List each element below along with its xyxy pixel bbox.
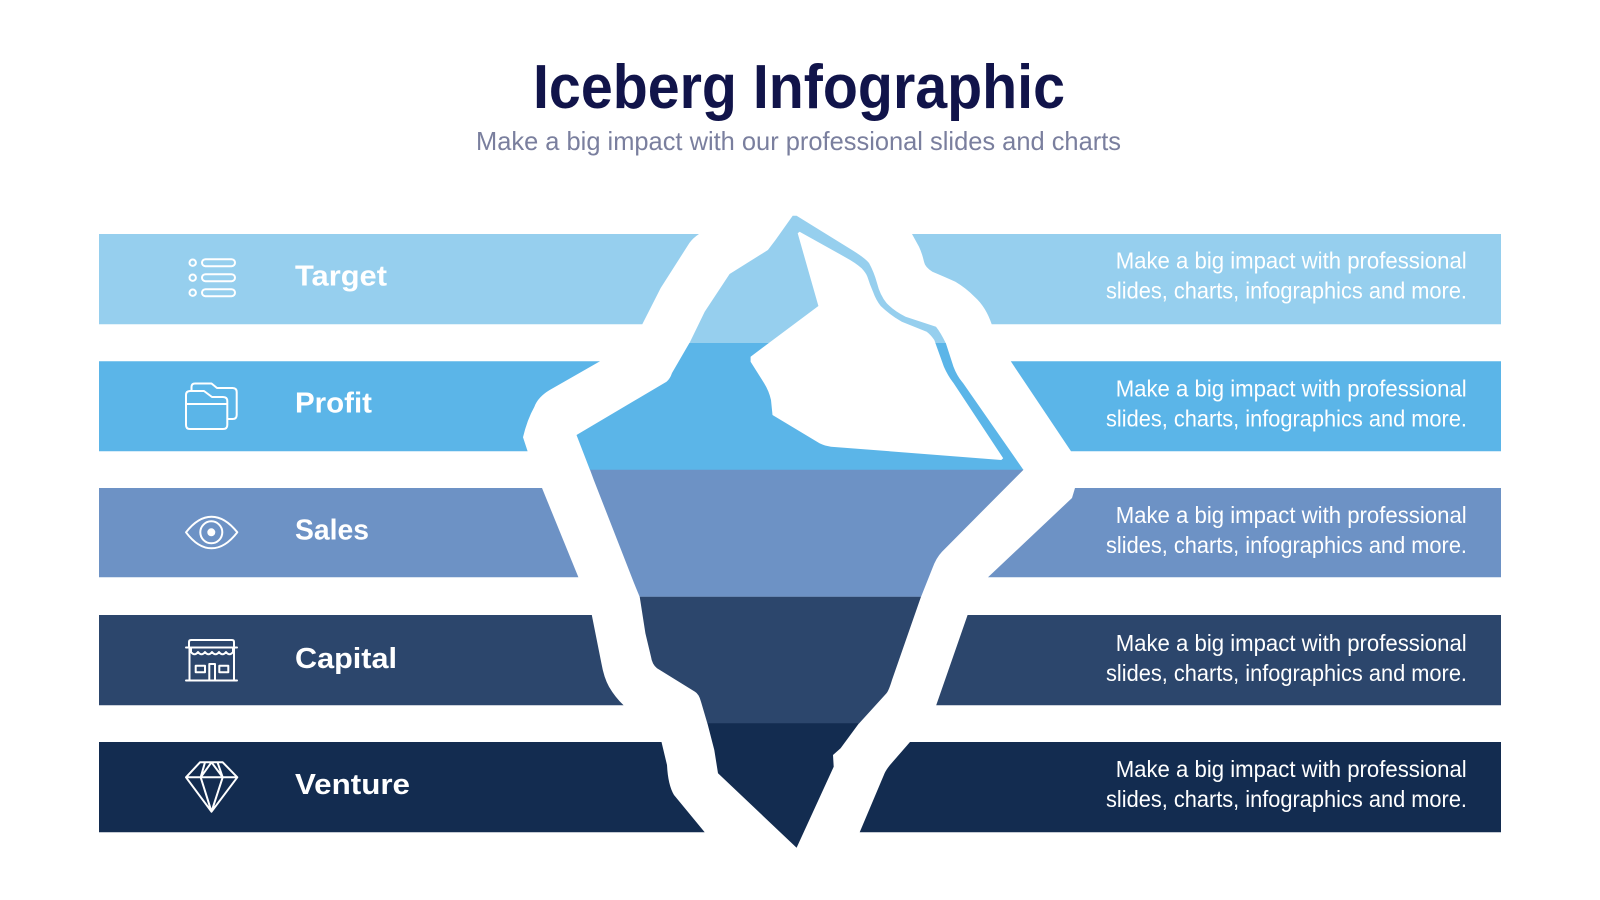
venture band left <box>99 742 705 832</box>
icon: list <box>190 259 235 296</box>
iceberg <box>576 216 1024 848</box>
subtitle: Make a big impact with our professional slides and charts <box>476 126 1121 156</box>
label: target: Target <box>295 260 387 292</box>
label: venture: Venture <box>295 769 410 801</box>
description: target: slides, charts, infographics and more. <box>1106 278 1467 304</box>
profit band right <box>1011 361 1501 451</box>
label: capital: Capital <box>295 643 397 675</box>
panel: target <box>99 234 1501 324</box>
capital band left <box>99 615 624 705</box>
description: capital: Make a big impact with professional <box>1116 630 1467 656</box>
panel: sales <box>99 488 1501 577</box>
label: sales: Sales <box>295 514 369 546</box>
icon: folder <box>186 384 237 429</box>
iceberg layer: base <box>707 723 859 848</box>
panel: capital <box>99 615 1501 705</box>
profit band left <box>99 361 600 451</box>
title: Iceberg Infographic <box>533 53 1065 122</box>
iceberg layer: upper water <box>590 470 1024 597</box>
icon: store <box>186 640 237 680</box>
panel: venture <box>99 742 1501 832</box>
icon: eye <box>186 517 237 548</box>
iceberg layer: peak <box>689 216 946 343</box>
description: venture: slides, charts, infographics and more. <box>1106 786 1467 812</box>
description: venture: Make a big impact with professional <box>1116 756 1467 782</box>
iceberg snow face <box>751 232 1003 460</box>
iceberg layer: deep water <box>640 597 921 724</box>
description: sales: slides, charts, infographics and more. <box>1106 532 1467 558</box>
iceberg layer: waterline <box>576 343 1024 470</box>
description: profit: slides, charts, infographics and more. <box>1106 406 1467 432</box>
description: target: Make a big impact with professional <box>1116 248 1467 274</box>
icon: diamond <box>186 762 237 812</box>
description: capital: slides, charts, infographics and more. <box>1106 660 1467 686</box>
capital band right <box>936 615 1501 705</box>
target band left <box>99 234 699 324</box>
description: sales: Make a big impact with professional <box>1116 502 1467 528</box>
target band right <box>912 234 1501 324</box>
sales band right <box>988 488 1501 577</box>
venture band right <box>860 742 1501 832</box>
sales band left <box>99 488 578 577</box>
label: profit: Profit <box>295 388 372 420</box>
panel: profit <box>99 361 1501 451</box>
description: profit: Make a big impact with professional <box>1116 376 1467 402</box>
